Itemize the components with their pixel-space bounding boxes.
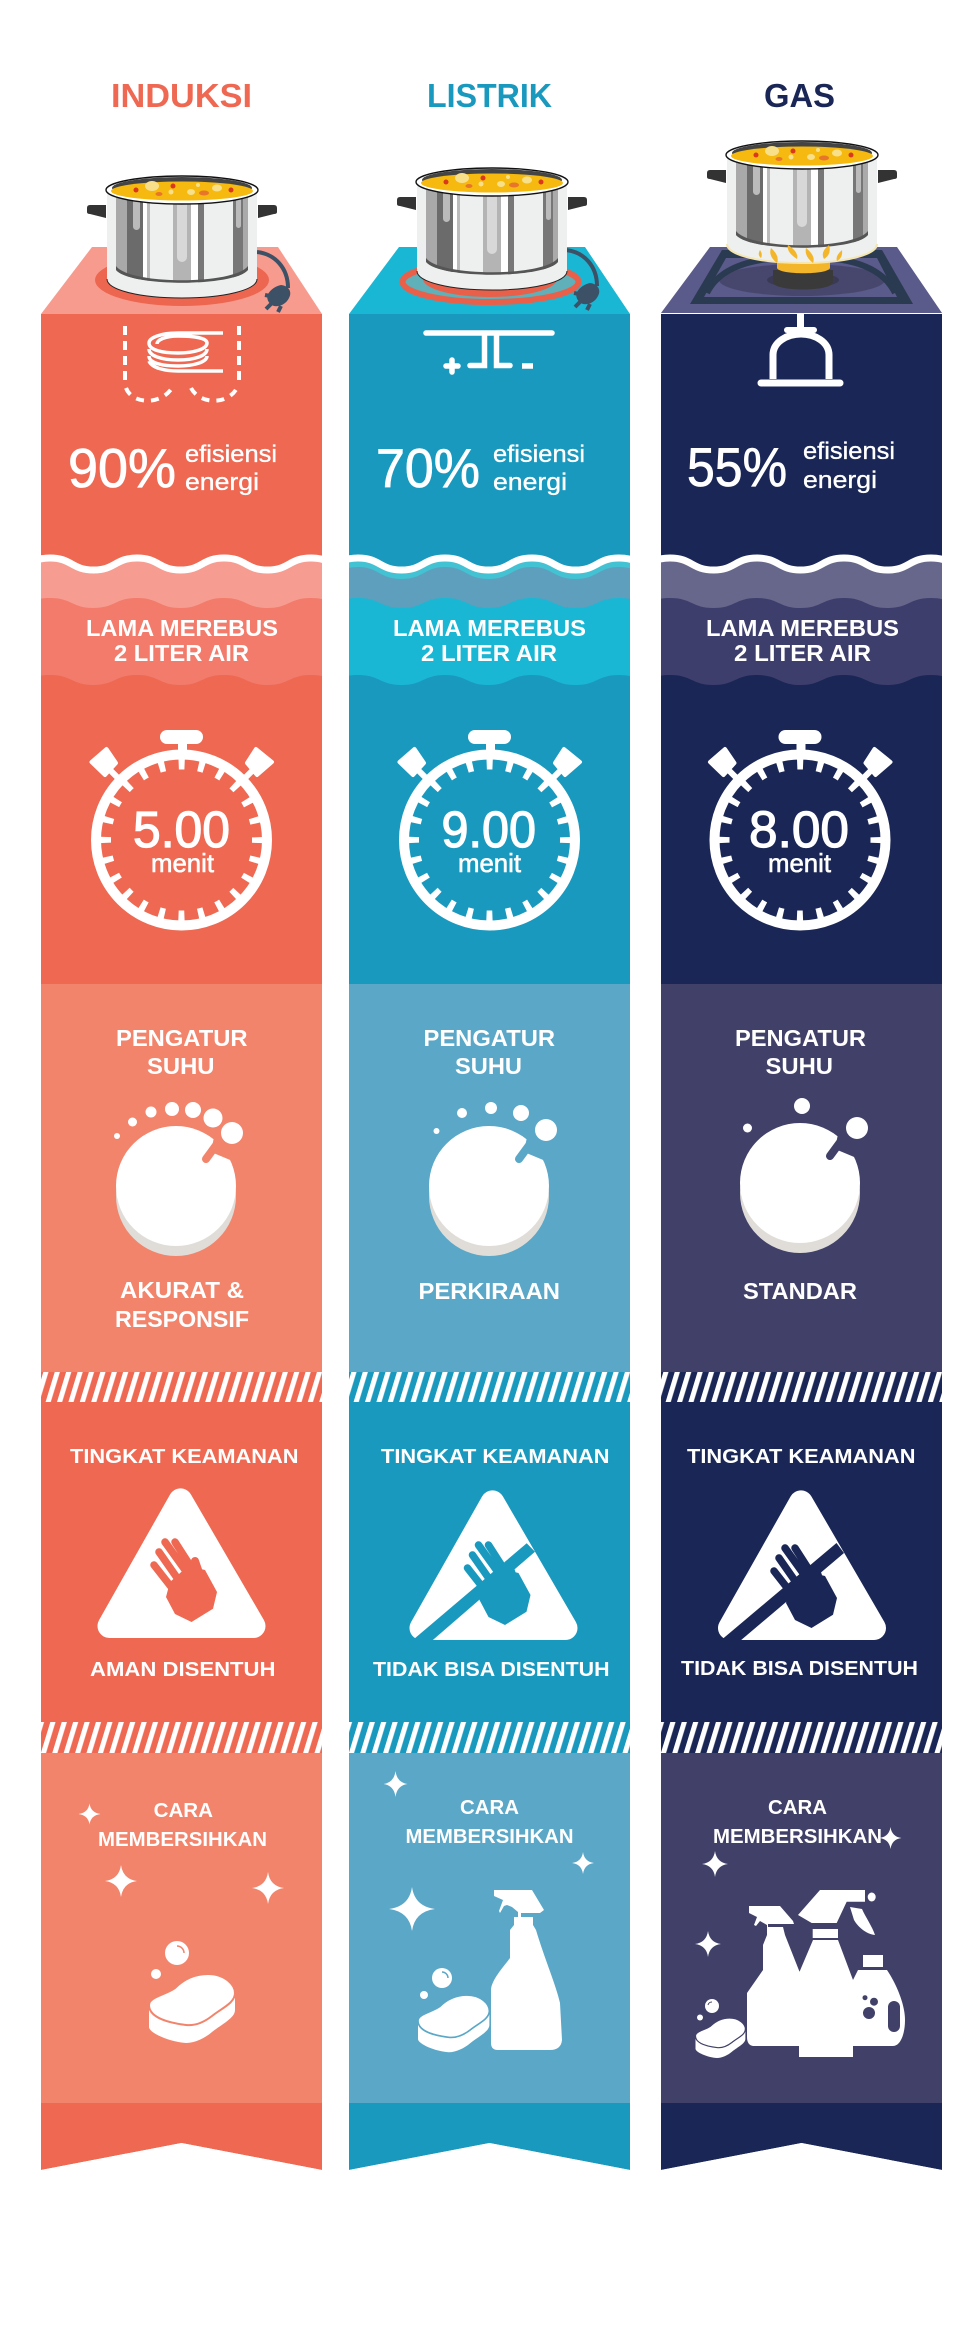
- heading: cara membersihkan: CARA: [768, 1796, 827, 1819]
- icons: sparkles: [384, 1771, 594, 1931]
- label: perkiraan: PERKIRAAN: [418, 1278, 560, 1304]
- stove top: induction: [41, 247, 322, 314]
- label: akurat & responsif: AKURAT &: [120, 1277, 244, 1303]
- heading: cara membersihkan: CARA: [154, 1799, 213, 1822]
- heading: cara membersihkan: CARA: [460, 1796, 519, 1819]
- icon: cleaning bottles: [747, 1890, 905, 2057]
- ribbon background: induksi: [41, 314, 322, 2170]
- heading: pengatur suhu: [735, 1025, 866, 1079]
- heading: pengatur suhu: PENGATUR: [116, 1025, 248, 1051]
- icon: stopwatch 5.00 menit: [92, 730, 272, 926]
- title: INDUKSI: INDUKSI: [111, 77, 252, 114]
- stat: 55% efisiensi energi: energi: [803, 467, 877, 494]
- heading: tingkat keamanan: TINGKAT KEAMANAN: [381, 1445, 610, 1468]
- icon: temperature knob: [114, 1102, 243, 1256]
- heading: lama merebus: [706, 615, 899, 666]
- ribbon background: gas: [661, 314, 942, 2170]
- icon: spray bottle: [491, 1890, 562, 2050]
- icon: crossed hand in triangle: [414, 1502, 566, 1645]
- heading: lama merebus: LAMA MEREBUS: [706, 615, 899, 641]
- icons: sparkles: [695, 1827, 902, 1957]
- label: akurat & responsif: RESPONSIF: [115, 1306, 249, 1332]
- heading: pengatur suhu: PENGATUR: [735, 1025, 866, 1051]
- heading: tingkat keamanan: TINGKAT KEAMANAN: [70, 1445, 298, 1468]
- column: listrik: [349, 167, 630, 2170]
- ribbon background: listrik: [349, 314, 630, 2170]
- icon: induction coil: [125, 326, 239, 401]
- heading: lama merebus: 2 LITER AIR: [114, 640, 249, 666]
- heading: cara membersihkan: MEMBERSIHKAN: [406, 1825, 574, 1848]
- label: aman disentuh: AMAN DISENTUH: [90, 1658, 276, 1681]
- heading: pengatur suhu: [116, 1025, 248, 1079]
- column: gas: [661, 140, 942, 2170]
- icon: temperature knob: [740, 1098, 868, 1253]
- heading: cara membersihkan: MEMBERSIHKAN: [713, 1825, 882, 1848]
- icon: stopwatch 9.00 menit: 9.00: [442, 801, 536, 858]
- icon: electric element: [426, 333, 552, 372]
- heading: pengatur suhu: SUHU: [766, 1053, 833, 1079]
- icon: sponge with bubbles: [696, 1999, 745, 2058]
- title: GAS: GAS: [764, 77, 835, 114]
- title: LISTRIK: LISTRIK: [427, 77, 552, 114]
- icon: flames: [759, 245, 842, 263]
- icon: power plug: [566, 250, 599, 310]
- stat: 70% efisiensi energi: 70%: [376, 437, 480, 499]
- stat: 90% efisiensi energi: efisiensi: [185, 441, 277, 468]
- label: akurat & responsif: [115, 1277, 249, 1332]
- icon: cooking pot: [707, 141, 897, 263]
- heading: pengatur suhu: PENGATUR: [424, 1025, 555, 1051]
- stat: 90% efisiensi energi: 90%: [68, 437, 176, 499]
- icon: cooking pot: [87, 176, 277, 298]
- heading: pengatur suhu: SUHU: [147, 1053, 214, 1079]
- heading: lama merebus: 2 LITER AIR: [734, 640, 871, 666]
- heading: tingkat keamanan: TINGKAT KEAMANAN: [687, 1445, 916, 1468]
- icon: power plug: [257, 252, 290, 312]
- icon: stopwatch 8.00 menit: [710, 730, 890, 926]
- heading: cara membersihkan: [406, 1796, 574, 1848]
- stat: 70% efisiensi energi: energi: [493, 469, 567, 496]
- icon: sponge with bubbles: [149, 1941, 235, 2043]
- icon: stopwatch 5.00 menit: 5.00: [133, 801, 230, 858]
- stat: 55% efisiensi energi: 55%: [687, 436, 787, 498]
- icon: hand in triangle: [110, 1500, 254, 1626]
- heading: lama merebus: LAMA MEREBUS: [393, 615, 586, 641]
- icon: crossed hand in triangle: [722, 1502, 874, 1647]
- heading: cara membersihkan: MEMBERSIHKAN: [98, 1828, 267, 1851]
- icon: stopwatch 8.00 menit: 8.00: [749, 801, 849, 858]
- stat: 90% efisiensi energi: energi: [185, 469, 259, 496]
- icon: gas flame symbol: [761, 313, 840, 383]
- icon: cooking pot: [397, 168, 587, 290]
- icon: sponge with bubbles: [418, 1968, 489, 2052]
- stove top: gas burner: [661, 247, 942, 313]
- column: induksi: [41, 175, 322, 2170]
- heading: lama merebus: [393, 615, 586, 666]
- stat: 90% efisiensi energi: [68, 437, 277, 499]
- stat: 55% efisiensi energi: efisiensi: [803, 438, 895, 465]
- icon: stopwatch 5.00 menit: menit: [151, 848, 215, 878]
- heading: pengatur suhu: [424, 1025, 555, 1079]
- heading: lama merebus: 2 LITER AIR: [421, 640, 557, 666]
- stat: 70% efisiensi energi: [376, 437, 585, 499]
- heading: pengatur suhu: SUHU: [455, 1053, 522, 1079]
- label: standar: STANDAR: [743, 1278, 857, 1304]
- icon: temperature knob: [429, 1102, 557, 1256]
- label: tidak bisa disentuh: TIDAK BISA DISENTUH: [373, 1658, 610, 1681]
- label: tidak bisa disentuh: TIDAK BISA DISENTUH: [681, 1657, 918, 1680]
- icon: stopwatch 9.00 menit: menit: [458, 848, 522, 878]
- icon: stopwatch 8.00 menit: menit: [768, 848, 832, 878]
- stove top: electric: [349, 247, 630, 314]
- icons: sparkles: [78, 1804, 284, 1904]
- stat: 55% efisiensi energi: [687, 436, 895, 498]
- stat: 70% efisiensi energi: efisiensi: [493, 441, 585, 468]
- icon: stopwatch 9.00 menit: [400, 730, 580, 926]
- heading: cara membersihkan: [713, 1796, 882, 1848]
- heading: cara membersihkan: [98, 1799, 267, 1851]
- heading: lama merebus: [86, 615, 278, 666]
- heading: lama merebus: LAMA MEREBUS: [86, 615, 278, 641]
